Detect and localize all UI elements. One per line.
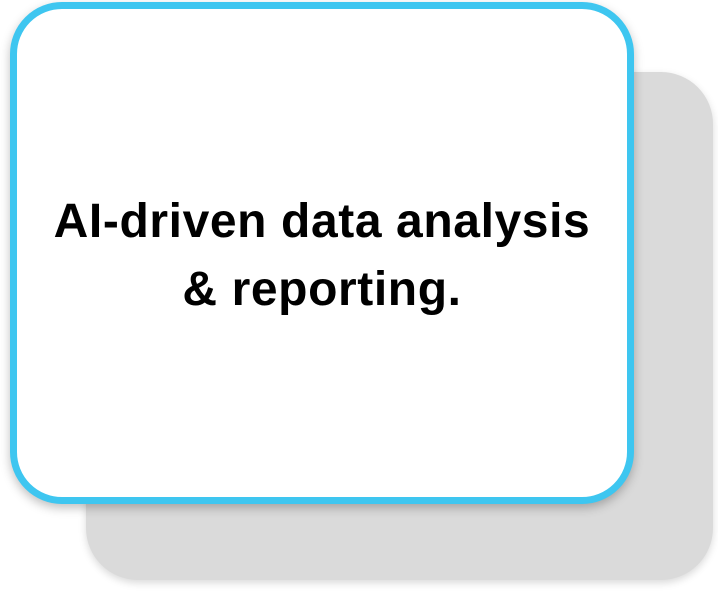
heading text: AI-driven data analysis bbox=[54, 195, 590, 248]
back card shadow panel bbox=[86, 72, 713, 580]
heading text: & reporting. bbox=[182, 263, 462, 316]
heading text bbox=[54, 195, 590, 316]
front card panel bbox=[10, 2, 634, 504]
